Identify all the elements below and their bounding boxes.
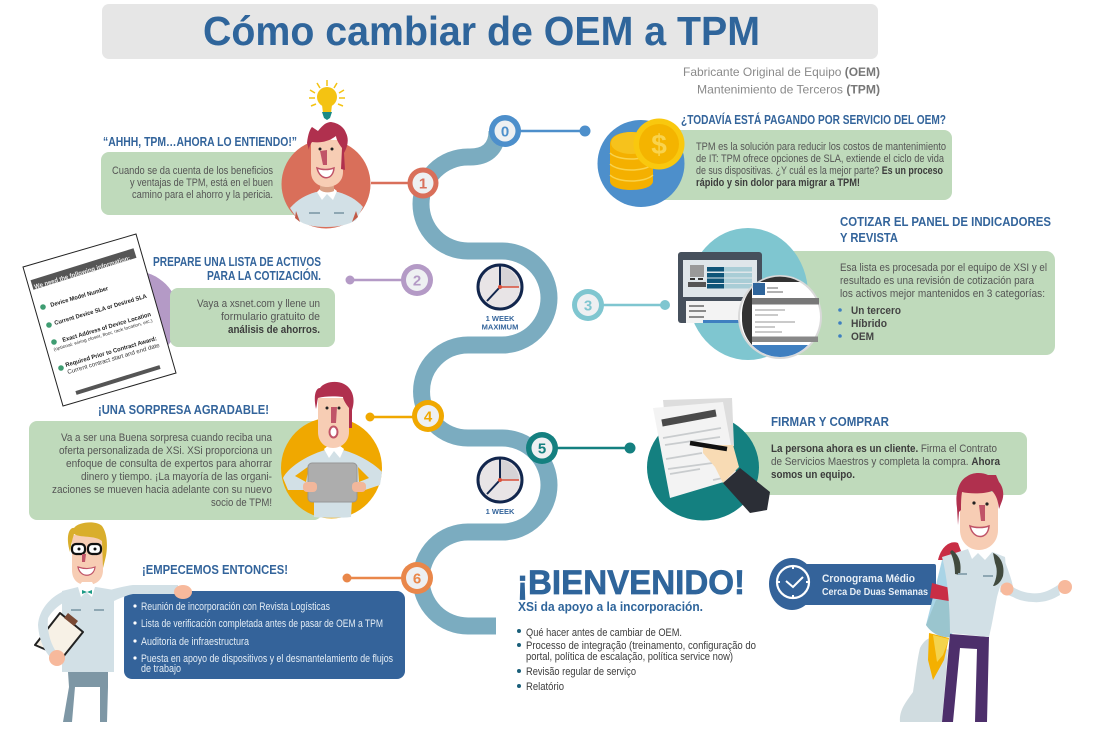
panel: step 5	[730, 415, 1027, 495]
panel: step 2	[89, 255, 335, 361]
title: Cómo cambiar de OEM a TPM	[203, 8, 760, 54]
panel: step 6	[124, 563, 405, 679]
heading: step 3: COTIZAR EL PANEL DE INDICADORES	[840, 215, 1051, 229]
text: step 1: y ventajas de TPM, está en el buen	[130, 177, 273, 189]
list: onboarding steps: Auditoria de infraestructura	[141, 636, 250, 648]
panel: step 1	[101, 135, 306, 215]
step 2 marker: 2	[413, 272, 421, 290]
character: man with glasses and clipboard	[35, 522, 192, 722]
step 0 marker: 0	[501, 124, 509, 140]
list: welcome support: portal, política de escalação, política service now)	[526, 651, 733, 663]
step 1 marker	[371, 168, 438, 198]
icon: signing contract	[647, 398, 770, 520]
text: step 1: Cuando se da cuenta de los beneficios	[112, 165, 273, 177]
clock: 1 week maximum: 1 WEEK	[486, 314, 515, 323]
serpentine path	[421, 131, 549, 626]
text: step 4	[52, 432, 273, 509]
text: step 2	[197, 298, 320, 336]
subtitle: acronyms: Mantenimiento de Terceros (TPM)	[697, 82, 880, 96]
text: step 3: resultado es una revisión de cotización para	[840, 275, 1035, 287]
step 3 marker: 3	[584, 298, 592, 314]
subtitle: acronyms: Fabricante Original de Equipo (OEM)	[683, 65, 880, 79]
step 3 marker	[572, 289, 670, 321]
icon: checklist document: Device Model Number	[50, 286, 110, 309]
icon: dashboard and magazine	[678, 228, 822, 360]
text: step 2: Vaya a xsnet.com y llene un	[197, 298, 320, 310]
step 5 marker: 5	[538, 440, 546, 458]
panel: step 3	[780, 215, 1055, 355]
text: step 5	[771, 443, 1001, 481]
clock: 1 week	[478, 458, 522, 516]
list: onboarding steps: Lista de verificación completada antes de pasar de OEM a TPM	[141, 618, 383, 630]
heading: step 2	[153, 255, 321, 283]
text: step 1	[112, 165, 273, 201]
clock: 1 week maximum: MAXIMUM	[482, 322, 518, 332]
text: step 4: dinero y tiempo. ¡La mayoría de las organi-	[81, 471, 272, 483]
icon: coins	[598, 118, 684, 207]
text: step 3: Esa lista es procesada por el equipo de XSI y el	[840, 262, 1047, 274]
list: categories: Híbrido	[851, 318, 887, 330]
heading: step 2: PARA LA COTIZACIÓN.	[207, 268, 321, 283]
heading: step 2: PREPARE UNA LISTA DE ACTIVOS	[153, 255, 321, 269]
step 4 marker: 4	[424, 408, 433, 426]
text: step 4: zaciones se mueven hacia adelante con su nuevo	[52, 484, 272, 496]
list: onboarding steps: de trabajo	[141, 663, 181, 675]
text: step 5: de Servicios Maestros y completa la compra. Ahora	[771, 456, 1001, 468]
heading: step 3	[840, 215, 1051, 245]
character: man with rocket pack	[900, 473, 1072, 722]
clock: 1 week: 1 WEEK	[486, 507, 515, 516]
icon: checklist document	[23, 234, 176, 406]
step 1 marker: 1	[419, 176, 427, 192]
icon: checklist document: Required Prior to Contract Award:	[65, 336, 158, 369]
callout: average timeline	[769, 558, 936, 610]
panel: step 0	[630, 112, 952, 200]
list: welcome support	[517, 627, 756, 693]
text: step 0: de sus dispositivas. ¿Y cuál es la mejor parte? Es un proceso	[696, 165, 943, 177]
text: step 2: formulario gratuito de	[221, 311, 320, 323]
icon: checklist document: Exact Address of Device Location	[62, 312, 152, 344]
list: onboarding steps	[133, 601, 393, 675]
list: categories: OEM	[851, 331, 874, 343]
list: welcome support: Relatório	[526, 681, 564, 693]
step 4 marker	[366, 400, 444, 432]
subheading: bienvenido: XSi da apoyo a la incorporación.	[518, 599, 703, 614]
list: welcome support: Processo de integração (treinamento, configuração do	[526, 640, 756, 652]
icon: checklist document: We need the following information:	[34, 255, 131, 291]
text: step 3	[840, 262, 1047, 300]
callout: average timeline: Cerca De Duas Semanas	[822, 587, 928, 598]
list: welcome support: Qué hacer antes de cambiar de OEM.	[526, 627, 682, 639]
heading: step 0: ¿TODAVÍA ESTÁ PAGANDO POR SERVICIO DEL OEM?	[681, 112, 946, 127]
icon: checklist document: Current contract start and end date	[67, 343, 161, 376]
list: onboarding steps: Puesta en apoyo de dispositivos y el desmantelamiento de flujos	[141, 653, 393, 665]
heading: bienvenido: ¡BIENVENIDO!	[517, 564, 745, 602]
heading: step 4: ¡UNA SORPRESA AGRADABLE!	[98, 403, 269, 417]
list: categories	[838, 305, 901, 343]
step 6 marker: 6	[413, 570, 421, 588]
text: step 4: Va a ser una Buena sorpresa cuando reciba una	[61, 432, 273, 444]
text: step 4: socio de TPM!	[211, 497, 272, 509]
heading: step 5: FIRMAR Y COMPRAR	[771, 415, 889, 429]
text: step 0: rápido y sin dolor para migrar a TPM!	[696, 177, 860, 189]
text: step 0	[696, 141, 946, 189]
list: onboarding steps: Reunión de incorporación con Revista Logísticas	[141, 601, 330, 613]
title	[102, 4, 878, 59]
icon: checklist document: (optional: wiring closet, floor, rack location, etc.)	[53, 318, 154, 352]
icon: surprised man with tablet	[281, 382, 382, 518]
icon: checklist document: Current Device SLA or Desired SLA	[54, 294, 148, 327]
text: step 1: camino para el ahorro y la pericia.	[132, 189, 273, 201]
text: step 0: de IT: TPM ofrece opciones de SLA, extiende el ciclo de vida	[696, 153, 945, 165]
heading: step 6: ¡EMPECEMOS ENTONCES!	[142, 563, 288, 577]
panel: step 4	[29, 403, 322, 520]
list: categories: Un tercero	[851, 305, 901, 317]
text: step 4: oferta personalizada de XSi. XSi proporciona un	[59, 445, 272, 457]
clock: 1 week maximum	[478, 265, 522, 332]
icon: light bulb	[309, 80, 345, 120]
icon: man with idea	[282, 122, 370, 228]
text: step 5: La persona ahora es un cliente. Firma el Contrato	[771, 443, 997, 455]
text: step 4: enfoque de consulta de expertos para ahorrar	[66, 458, 272, 470]
text: step 0: TPM es la solución para reducir los costos de mantenimiento	[696, 141, 946, 153]
text: step 2: análisis de ahorros.	[228, 324, 320, 336]
step 6 marker	[342, 562, 433, 594]
text: step 3: los activos mejor mantenidos en 3 categorías:	[840, 288, 1045, 300]
icon: coins: $	[651, 129, 667, 160]
list: welcome support: Revisão regular de serviço	[526, 666, 636, 678]
heading: step 3: Y REVISTA	[840, 231, 898, 245]
step 2 marker	[346, 264, 433, 296]
heading: step 1: “AHHH, TPM…AHORA LO ENTIENDO!”	[103, 135, 297, 149]
step 5 marker	[526, 432, 636, 464]
subtitle: acronyms	[683, 65, 880, 96]
step 0 marker	[489, 115, 590, 147]
text: step 5: somos un equipo.	[771, 469, 855, 481]
callout: average timeline: Cronograma Médio	[822, 573, 915, 585]
